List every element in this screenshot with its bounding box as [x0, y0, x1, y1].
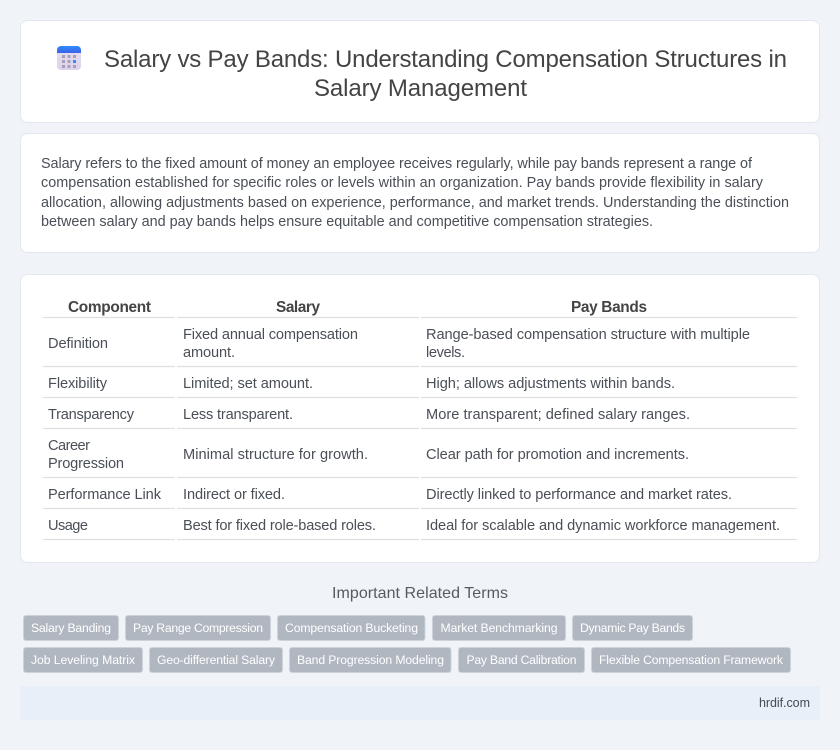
row: transparency [48, 407, 690, 423]
intro paragraph: allocation, allowing adjustments based on experience, performance, and market trends. Understanding the distinction [41, 195, 789, 211]
row: definition [48, 327, 750, 361]
tag: geo-differential salary: Geo-differential Salary [157, 653, 276, 667]
row: career progression: Progression [48, 456, 124, 472]
row: performance link: Directly linked to performance and market rates. [426, 487, 732, 503]
row: usage [48, 518, 780, 534]
row: definition: Definition [48, 336, 108, 352]
footer bar [20, 686, 820, 720]
table header row: Salary [276, 299, 320, 316]
row: usage: Best for fixed role-based roles. [183, 518, 376, 534]
panel: comparison table [20, 274, 820, 562]
tag: compensation bucketing [278, 616, 425, 640]
tag: pay range compression: Pay Range Compression [133, 621, 263, 635]
row: usage: Ideal for scalable and dynamic workforce management. [426, 518, 780, 534]
intro paragraph: between salary and pay bands helps ensure equitable and competitive compensation strategies. [41, 214, 653, 230]
heading: important related terms: Important Related Terms [332, 585, 508, 602]
table header row: Component [68, 299, 151, 316]
row: flexibility: Limited; set amount. [183, 376, 313, 392]
row: career progression: Minimal structure for growth. [183, 447, 368, 463]
table header row: Pay Bands [571, 299, 647, 316]
tag: job leveling matrix: Job Leveling Matrix [31, 653, 135, 667]
table header row [68, 299, 647, 316]
tag: job leveling matrix [24, 648, 142, 672]
row: definition: Range-based compensation structure with multiple [426, 327, 750, 343]
row: transparency: More transparent; defined salary ranges. [426, 407, 690, 423]
row: flexibility: Flexibility [48, 376, 108, 392]
header panel [20, 20, 820, 122]
icon: calendar [57, 46, 81, 70]
related term tags [24, 616, 790, 672]
tag: dynamic pay bands [572, 616, 692, 640]
intro paragraph: compensation established for specific roles or levels within an organization. Pay bands provide flexibility in salary [41, 175, 764, 191]
row: flexibility [48, 376, 675, 392]
row: career progression: Clear path for promotion and increments. [426, 447, 689, 463]
row: transparency: Transparency [48, 407, 135, 423]
tag: market benchmarking [432, 616, 566, 640]
tag: compensation bucketing: Compensation Bucketing [285, 621, 418, 635]
row: transparency: Less transparent. [183, 407, 293, 423]
title [104, 46, 787, 102]
tag: flexible compensation framework: Flexible Compensation Framework [599, 653, 784, 667]
tag: market benchmarking: Market Benchmarking [440, 621, 558, 635]
footer source text: hrdif.com [759, 696, 810, 710]
tag: band progression modeling: Band Progression Modeling [297, 653, 444, 667]
row: usage: Usage [48, 518, 88, 534]
tag: salary banding: Salary Banding [31, 621, 111, 635]
row: definition: Fixed annual compensation [183, 327, 358, 343]
row: career progression: Career [48, 438, 90, 454]
tag: geo-differential salary [150, 648, 282, 672]
intro paragraph: Salary refers to the fixed amount of money an employee receives regularly, while pay bands represent a range of [41, 156, 753, 172]
tag: flexible compensation framework [592, 648, 790, 672]
row: definition: levels. [426, 345, 465, 361]
title: Salary Management [314, 75, 527, 102]
row: career progression [48, 438, 689, 472]
title: Salary vs Pay Bands: Understanding Compensation Structures in [104, 46, 787, 73]
tag: salary banding [24, 616, 118, 640]
row: performance link: Performance Link [48, 487, 162, 503]
row: performance link: Indirect or fixed. [183, 487, 285, 503]
intro paragraph [41, 156, 789, 230]
row: performance link [48, 487, 732, 503]
panel: introduction text [20, 134, 820, 252]
tag: pay band calibration [458, 648, 584, 672]
tag: dynamic pay bands: Dynamic Pay Bands [580, 621, 685, 635]
row: flexibility: High; allows adjustments within bands. [426, 376, 675, 392]
tag: band progression modeling [290, 648, 451, 672]
tag: pay range compression [126, 616, 270, 640]
row: definition: amount. [183, 345, 235, 361]
tag: pay band calibration: Pay Band Calibration [466, 653, 576, 667]
